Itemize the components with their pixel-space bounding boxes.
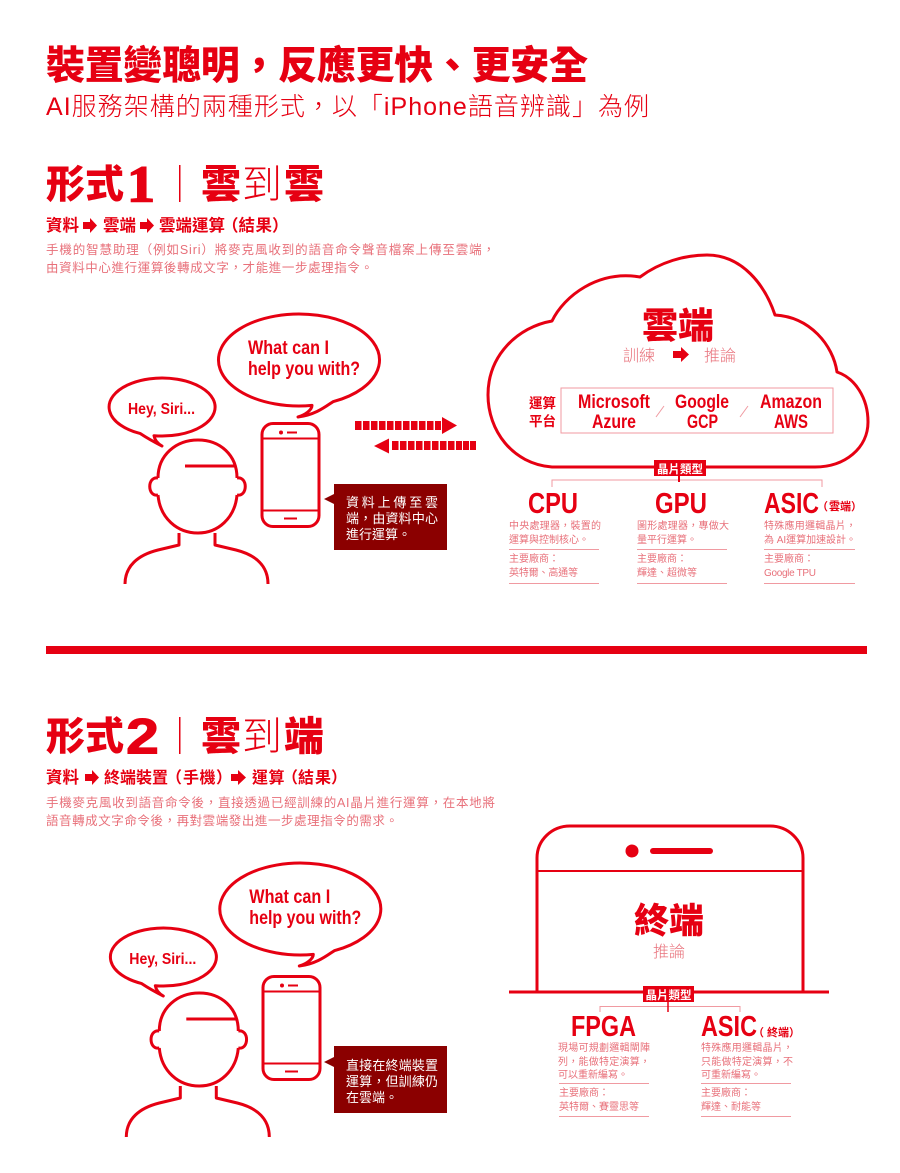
device diagram bbox=[509, 826, 829, 992]
chip: GPU bbox=[637, 488, 729, 584]
callout: upload to data center bbox=[324, 484, 447, 550]
chip: ASIC edge: 主要廠商： bbox=[701, 1086, 751, 1099]
speech bubble: What can I help you with: What can I bbox=[249, 887, 330, 908]
heading: form 2: 雲 bbox=[201, 715, 241, 759]
panel: form 2 cloud to edge bbox=[46, 708, 829, 1137]
arrow: upload to cloud bbox=[355, 417, 457, 434]
chip: FPGA: 主要廠商： bbox=[559, 1086, 609, 1099]
inference: 推論 bbox=[653, 943, 685, 961]
heading: form 2: 2 bbox=[126, 708, 159, 764]
callout: upload to data center: 資料上傳至雲 bbox=[346, 495, 438, 510]
speech bubble: Hey Siri bbox=[110, 928, 216, 996]
chip: GPU: 主要廠商： bbox=[637, 552, 687, 565]
speech bubble: Hey Siri: Hey, Siri... bbox=[128, 401, 195, 418]
callout: compute on device bbox=[324, 1046, 447, 1113]
chip: FPGA bbox=[558, 1011, 650, 1116]
heading: form 2: 端 bbox=[284, 715, 324, 759]
flow line: data to device: 終端裝置（手機） bbox=[104, 768, 232, 787]
chip: CPU: 中央處理器，裝置的 bbox=[509, 519, 601, 532]
speech bubble: What can I help you with: help you with? bbox=[249, 908, 361, 929]
computing platforms: Microsoft bbox=[578, 392, 651, 413]
heading: form 2: 到 bbox=[242, 715, 282, 759]
subtitle: AI服務架構的兩種形式，以「iPhone語音辨識」為例 bbox=[46, 93, 649, 121]
heading: form 1 bbox=[46, 156, 324, 214]
chip: ASIC edge: 輝達、耐能等 bbox=[701, 1100, 761, 1113]
device heading: 終端 bbox=[634, 902, 704, 941]
description text: 手機麥克風收到語音命令後，直接透過已經訓練的AI晶片進行運算，在本地將 bbox=[46, 795, 495, 810]
chip: FPGA: 現場可規劃邏輯閘陣 bbox=[558, 1041, 650, 1054]
flow line: data to cloud: 雲端 bbox=[103, 216, 136, 235]
chip type label: 晶片類型 bbox=[646, 988, 692, 1002]
speech bubble: Hey Siri bbox=[109, 378, 215, 446]
icon: phone bbox=[263, 976, 320, 1080]
chip: CPU: 英特爾、高通等 bbox=[509, 566, 578, 579]
chip: ASIC edge bbox=[701, 1011, 800, 1116]
chip: ASIC cloud: 主要廠商： bbox=[764, 552, 814, 565]
chip type label bbox=[600, 986, 740, 1012]
speech bubble: Hey Siri: Hey, Siri... bbox=[129, 951, 196, 968]
heading: form 1: 雲 bbox=[284, 163, 324, 207]
description text: 手機的智慧助理（例如Siri）將麥克風收到的語音命令聲音檔案上傳至雲端， bbox=[46, 242, 495, 257]
flow line: data to device bbox=[46, 767, 347, 787]
computing platforms: 運算 bbox=[529, 395, 556, 411]
flow line: data to device: 資料 bbox=[46, 767, 80, 787]
description text: 由資料中心進行運算後轉成文字，才能進一步處理指令。 bbox=[46, 260, 373, 275]
speech bubble: What can I help you with bbox=[219, 314, 380, 417]
chip: ASIC cloud: ASIC bbox=[764, 488, 819, 520]
speech bubble: What can I help you with bbox=[220, 863, 381, 966]
chip: CPU: 主要廠商： bbox=[509, 552, 559, 565]
description text bbox=[46, 795, 495, 828]
flow line: data to cloud: 雲端運算（結果） bbox=[159, 215, 288, 235]
description text bbox=[46, 242, 495, 275]
icon: person bbox=[126, 993, 269, 1137]
chip: FPGA: FPGA bbox=[571, 1011, 636, 1043]
flow line: data to device: 運算（結果） bbox=[252, 768, 347, 787]
training to inference: 推論 bbox=[704, 347, 736, 365]
callout: upload to data center: 端，由資料中心 bbox=[346, 511, 438, 526]
chip: GPU: 圖形處理器，專做大 bbox=[637, 519, 729, 532]
divider bar bbox=[46, 646, 867, 654]
chip: ASIC cloud bbox=[764, 488, 862, 584]
chip: ASIC edge: （終端） bbox=[753, 1025, 800, 1039]
chip: CPU: 運算與控制核心。 bbox=[509, 533, 589, 546]
heading: form 2: 形式 bbox=[46, 716, 124, 759]
heading: form 1: 1 bbox=[127, 156, 155, 214]
speech bubble: What can I help you with: What can I bbox=[248, 338, 329, 359]
heading: form 1: 形式 bbox=[46, 164, 124, 207]
chip: ASIC edge: 只能做特定演算，不 bbox=[701, 1055, 793, 1068]
training to inference bbox=[623, 347, 736, 365]
chip: ASIC cloud: （雲端） bbox=[817, 499, 862, 513]
chip: GPU: 輝達、超微等 bbox=[637, 566, 697, 579]
chip: GPU: 量平行運算。 bbox=[637, 533, 697, 546]
computing platforms: Amazon bbox=[760, 392, 822, 413]
computing platforms: 平台 bbox=[529, 413, 556, 429]
cloud heading: 雲端 bbox=[642, 305, 714, 346]
computing platforms: Google bbox=[675, 392, 729, 413]
chip: ASIC cloud: Google TPU bbox=[764, 568, 816, 579]
callout: compute on device: 運算，但訓練仍 bbox=[346, 1074, 438, 1089]
computing platforms: GCP bbox=[687, 412, 718, 433]
chip: ASIC edge: 特殊應用邏輯晶片， bbox=[701, 1041, 793, 1054]
description text: 語音轉成文字命令後，再對雲端發出進一步處理指令的需求。 bbox=[46, 813, 398, 828]
chip: FPGA: 英特爾、賽靈思等 bbox=[559, 1100, 639, 1113]
title: 裝置變聰明，反應更快、更安全 bbox=[46, 44, 588, 88]
computing platforms bbox=[529, 388, 833, 433]
heading: form 1: 到 bbox=[242, 163, 282, 207]
chip: GPU: GPU bbox=[655, 488, 707, 520]
cloud diagram bbox=[488, 255, 868, 467]
chip type label: 晶片類型 bbox=[657, 462, 703, 476]
flow line: data to cloud bbox=[46, 215, 288, 235]
flow line: data to cloud: 資料 bbox=[46, 215, 80, 235]
callout: compute on device: 在雲端。 bbox=[346, 1090, 398, 1105]
icon: person bbox=[125, 440, 268, 584]
computing platforms: Azure bbox=[592, 412, 636, 433]
chip: ASIC cloud: 特殊應用邏輯晶片， bbox=[764, 519, 856, 532]
heading: form 1: 雲 bbox=[201, 163, 241, 207]
chip: CPU bbox=[509, 488, 601, 584]
panel: form 1 cloud to cloud bbox=[46, 156, 868, 584]
chip type label bbox=[552, 460, 822, 487]
callout: compute on device: 直接在終端裝置 bbox=[346, 1058, 438, 1073]
chip: FPGA: 列，能做特定演算， bbox=[558, 1055, 650, 1068]
heading: form 2 bbox=[46, 708, 324, 764]
icon: phone bbox=[262, 424, 319, 526]
speech bubble: What can I help you with: help you with? bbox=[248, 359, 360, 380]
training to inference: 訓練 bbox=[623, 347, 655, 365]
chip: ASIC edge: ASIC bbox=[701, 1011, 757, 1043]
computing platforms: AWS bbox=[774, 412, 808, 433]
chip: ASIC cloud: 為 AI運算加速設計。 bbox=[764, 533, 856, 546]
callout: upload to data center: 進行運算。 bbox=[346, 527, 411, 542]
chip: ASIC edge: 可重新編寫。 bbox=[701, 1068, 761, 1081]
chip: FPGA: 可以重新編寫。 bbox=[558, 1068, 628, 1081]
chip: CPU: CPU bbox=[528, 488, 578, 520]
arrow: download from cloud bbox=[374, 438, 476, 454]
